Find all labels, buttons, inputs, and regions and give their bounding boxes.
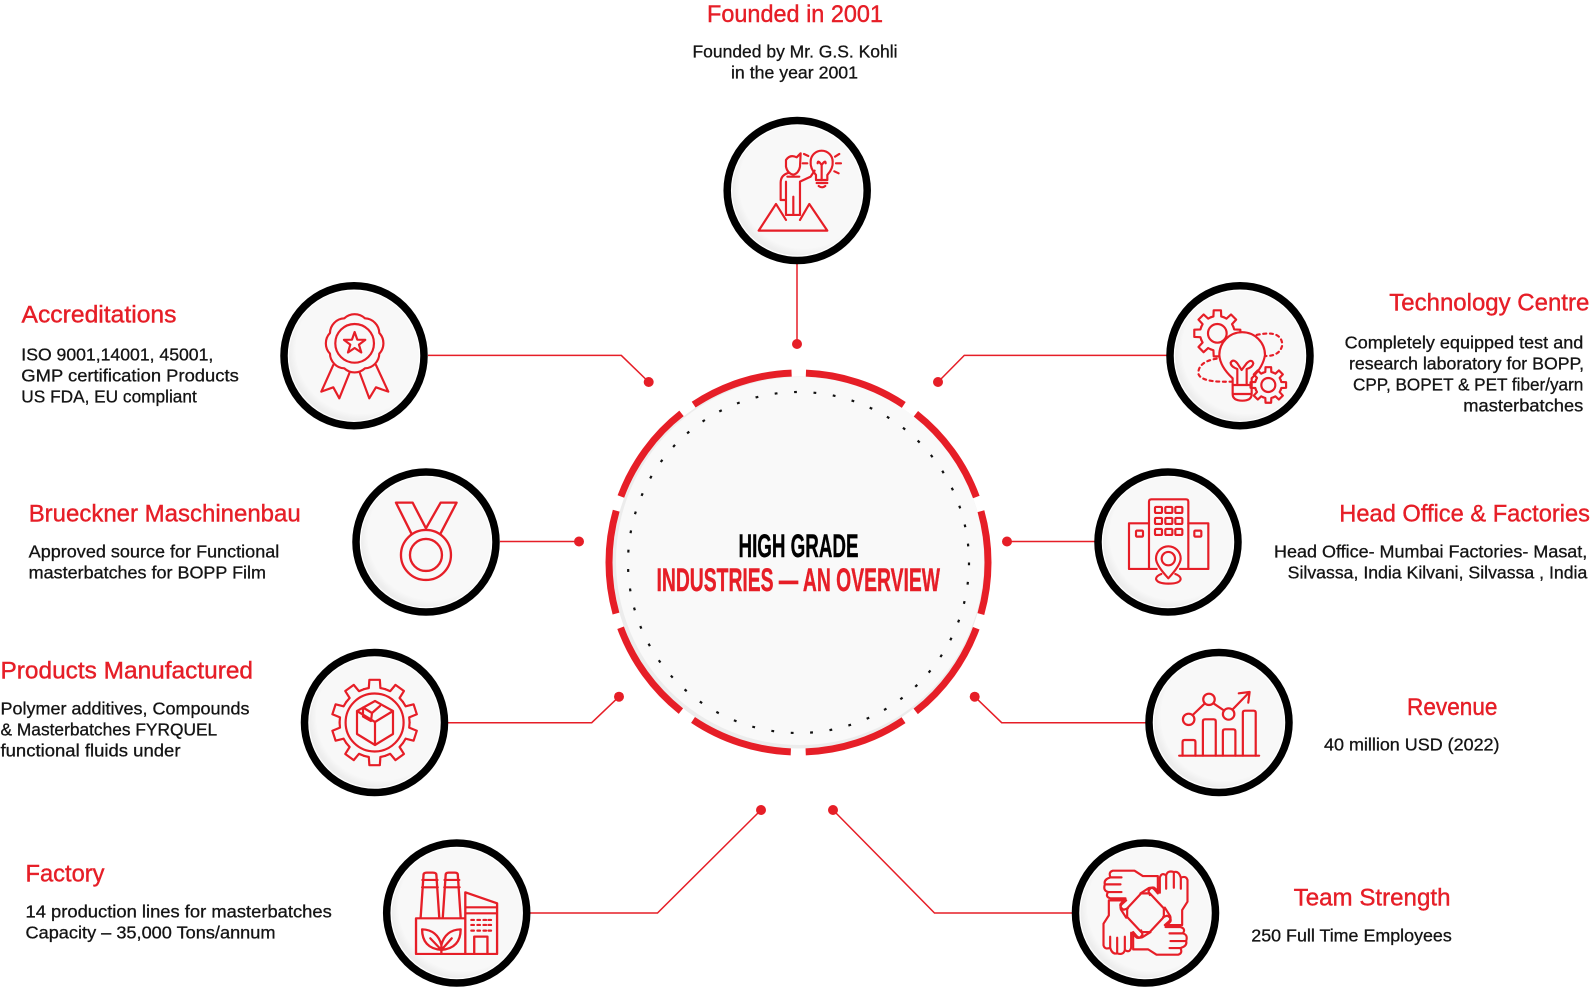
heading: Products Manufactured (0, 658, 253, 685)
description (26, 902, 332, 943)
icon: founder with light bulb on mountain (759, 151, 841, 231)
connector (428, 355, 654, 387)
connector (792, 264, 802, 349)
description: Founded by Mr. G.S. Kohli (692, 42, 898, 62)
badge circle (356, 472, 496, 612)
connector (970, 692, 1146, 723)
description: 14 production lines for masterbatches (26, 902, 332, 922)
heading: Technology Centre (1389, 290, 1589, 317)
description: in the year 2001 (731, 63, 858, 83)
icon: office building with pin (1129, 499, 1208, 584)
description (0, 698, 250, 760)
heading: Accreditations (22, 302, 176, 329)
description: research laboratory for BOPP, (1349, 354, 1584, 374)
description: US FDA, EU compliant (21, 386, 197, 406)
heading: Revenue (1407, 694, 1498, 721)
badge circle (304, 652, 444, 792)
heading: Factory (26, 861, 104, 888)
description: ISO 9001,14001, 45001, (21, 344, 213, 364)
icon: medal (396, 503, 457, 580)
panel: team strength (828, 805, 1452, 983)
badge circle (284, 286, 424, 426)
connector (448, 692, 624, 723)
hub title (656, 528, 940, 598)
icon: growth chart (1179, 692, 1259, 756)
hub title: HIGH GRADE (738, 528, 858, 564)
description (1274, 542, 1588, 583)
description (29, 542, 279, 583)
description: masterbatches for BOPP Film (29, 563, 266, 583)
description: & Masterbatches FYRQUEL (0, 719, 217, 739)
badge circle (1149, 652, 1289, 792)
panel: factory (26, 805, 766, 983)
description: Capacity – 35,000 Tons/annum (26, 923, 276, 943)
description (1345, 333, 1584, 416)
heading: Founded in 2001 (707, 1, 883, 28)
description: masterbatches (1463, 396, 1584, 416)
description: Silvassa, India Kilvani, Silvassa , India (1288, 563, 1588, 583)
icon: factory with leaf (416, 873, 497, 954)
description: GMP certification Products (21, 365, 239, 385)
panel: accreditations (21, 286, 654, 426)
description: Completely equipped test and (1345, 333, 1583, 353)
description: CPP, BOPET & PET fiber/yarn (1353, 375, 1583, 395)
description: 250 Full Time Employees (1251, 925, 1452, 945)
connector (1002, 536, 1095, 546)
icon: gears and bulb (1194, 310, 1286, 403)
panel: founded in 2001 (692, 1, 898, 349)
connector (530, 805, 766, 913)
panel: technology centre (933, 286, 1589, 426)
description: functional fluids under (0, 740, 181, 760)
description (21, 344, 239, 406)
badge circle (1170, 286, 1310, 426)
heading: Team Strength (1294, 885, 1450, 912)
hub disc (612, 376, 984, 748)
panel: products manufactured (0, 652, 624, 792)
heading: Head Office & Factories (1339, 501, 1590, 528)
badge circle (387, 843, 527, 983)
dotted inner ring (628, 392, 969, 733)
connector (933, 355, 1167, 387)
description: Approved source for Functional (29, 542, 279, 562)
icon: four joined hands (1104, 871, 1187, 955)
connector (500, 536, 584, 546)
description: Polymer additives, Compounds (0, 698, 250, 718)
badge circle (727, 120, 867, 260)
connector (828, 805, 1073, 913)
heading: Brueckner Maschinenbau (29, 501, 301, 528)
panel: head office and factories (1002, 472, 1590, 612)
panel: brueckner maschinenbau (29, 472, 584, 612)
central hub (609, 373, 988, 752)
badge circle (1076, 843, 1216, 983)
icon: rosette award (321, 314, 388, 398)
segmented red ring (609, 373, 988, 752)
description: Head Office- Mumbai Factories- Masat, (1274, 542, 1587, 562)
hub title: INDUSTRIES — AN OVERVIEW (656, 562, 940, 598)
badge circle (1098, 472, 1238, 612)
panel: revenue (970, 652, 1500, 792)
description: 40 million USD (2022) (1324, 734, 1500, 754)
description (692, 42, 898, 83)
icon: gear with box (331, 680, 419, 765)
